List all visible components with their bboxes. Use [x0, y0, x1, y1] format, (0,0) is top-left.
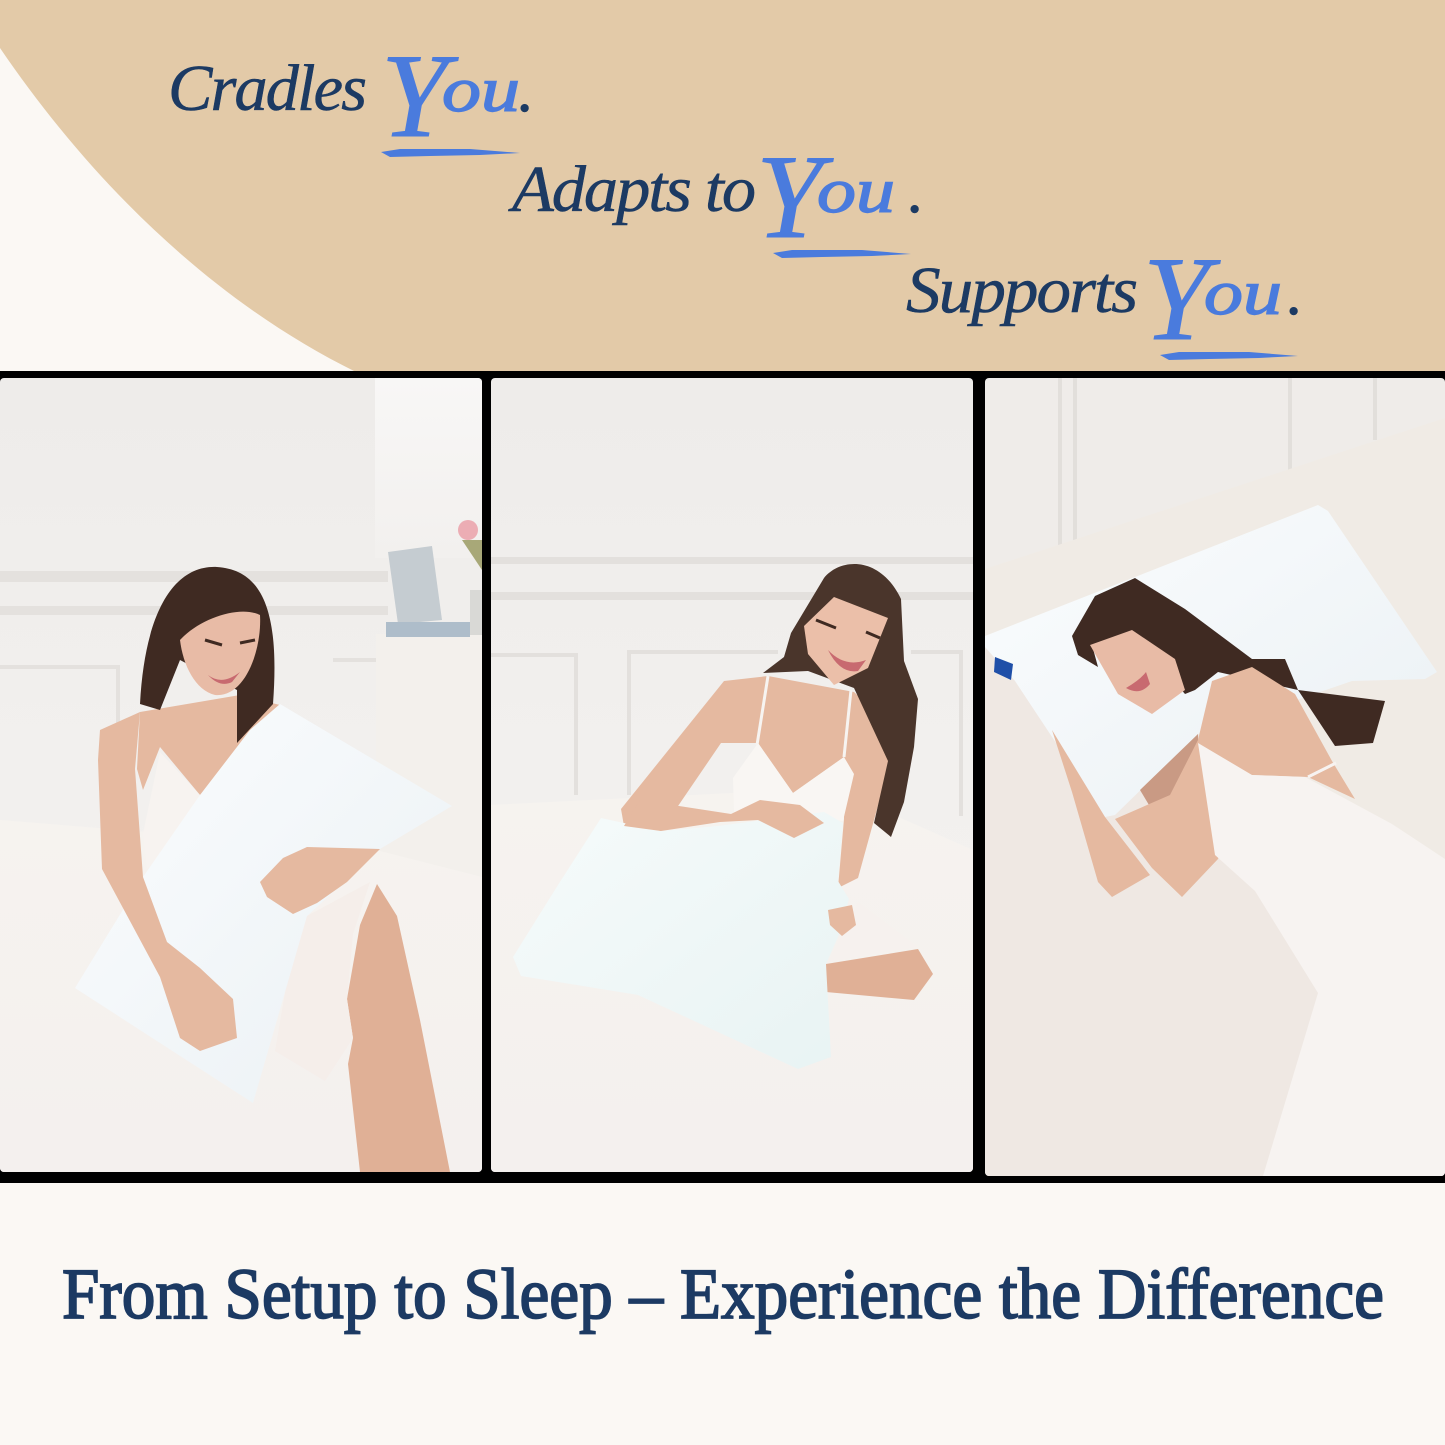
- panel: photo 1, woman sitting and hugging pillow: [0, 378, 482, 1172]
- headline: Adapts to You.: [508, 130, 922, 263]
- headline: Cradles You.: Cradles: [168, 52, 365, 125]
- footer heading: From Setup to Sleep – Experience the Difference: [62, 1254, 1384, 1334]
- woman, lying: [1052, 578, 1445, 1176]
- headline: Supports You.: Y: [1143, 232, 1210, 365]
- panel: photo 3, woman lying asleep on pillow: [985, 378, 1445, 1176]
- headline: Cradles You.: [168, 29, 532, 162]
- headline: Supports You.: ou: [1204, 257, 1282, 328]
- headline: Cradles You.: ou: [442, 54, 520, 125]
- headline: Adapts to You.: ou: [817, 155, 895, 226]
- woman, seated: [137, 567, 450, 1172]
- top banner background: [0, 0, 1445, 372]
- headline: Adapts to You.: Adapts to: [508, 153, 755, 226]
- arm and hand, left: [98, 712, 237, 1051]
- woman, seated: [621, 564, 933, 1000]
- headline: Adapts to You.: .: [908, 154, 922, 227]
- headline: Supports You.: .: [1287, 256, 1302, 329]
- headline: Adapts to You.: Y: [756, 130, 823, 263]
- hand on pillow, top: [624, 800, 824, 838]
- headline: Cradles You.: Y: [381, 29, 448, 162]
- headline: Supports You.: Supports: [906, 254, 1136, 327]
- pillow: [513, 812, 849, 1069]
- pillow: [985, 505, 1437, 817]
- headline: Supports You.: [906, 232, 1302, 365]
- arm and hand, right: [260, 847, 380, 914]
- pillow tag: [994, 657, 1013, 680]
- panel: photo 2, woman sitting with pillow in lap: [491, 378, 973, 1172]
- pillow: [75, 704, 452, 1103]
- hand on pillow, side: [828, 905, 856, 936]
- headline: Cradles You.: .: [518, 53, 532, 126]
- black photo strip: [0, 371, 1445, 1183]
